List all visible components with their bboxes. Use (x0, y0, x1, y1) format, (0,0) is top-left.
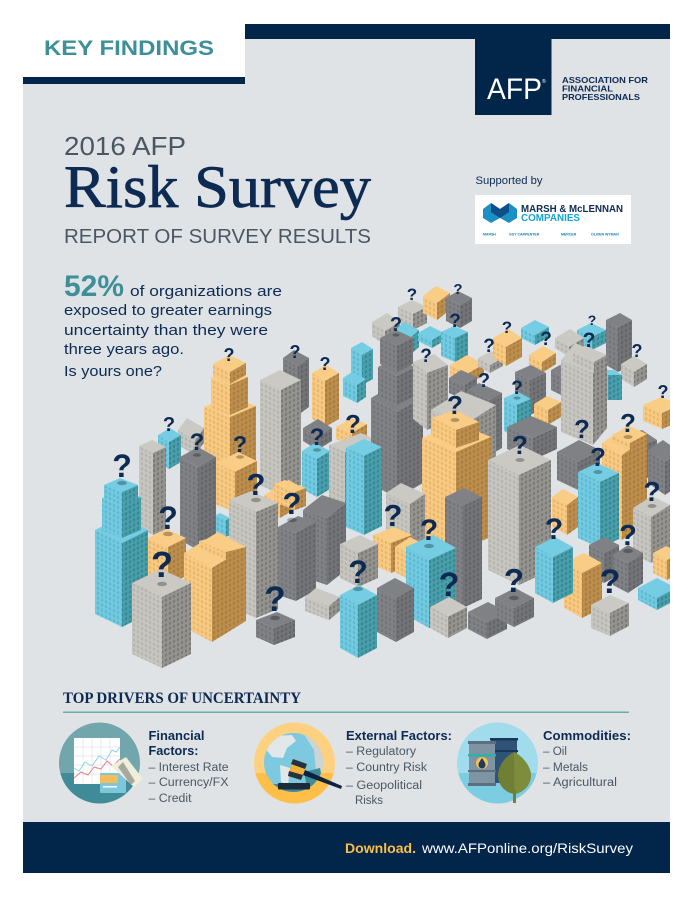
icon: globe and gavel (254, 722, 342, 804)
question marks over buildings: ? (158, 500, 178, 536)
question marks over buildings: ? (453, 281, 463, 298)
question marks over buildings: ? (112, 448, 132, 484)
question marks over buildings: ? (583, 329, 595, 352)
icon: oil barrels and leaf (457, 722, 538, 804)
question marks over buildings: ? (151, 544, 173, 585)
footer bar (23, 822, 670, 873)
text: financial factors: Financial (148, 729, 204, 743)
lead statistic text: of organizations are (130, 283, 282, 300)
question marks over buildings: ? (620, 408, 636, 438)
sponsor logo: Marsh & McLennan Companies: MARSH & McLENNAN (521, 204, 623, 215)
question marks over buildings: ? (511, 378, 523, 399)
text: external factors: – Regulatory (346, 746, 416, 758)
question marks over buildings: ? (420, 514, 438, 547)
AFP logo: ® (542, 78, 546, 85)
question marks over buildings: ? (600, 563, 620, 601)
question marks over buildings: ? (320, 354, 330, 374)
question marks over buildings: ? (439, 566, 459, 604)
top navy bar (245, 24, 670, 39)
question marks over buildings: ? (447, 390, 463, 420)
text: external factors (346, 729, 452, 807)
text: financial factors (148, 729, 229, 805)
question marks over buildings: ? (658, 382, 668, 402)
question marks over buildings (112, 281, 668, 619)
text: commodities: – Metals (543, 762, 588, 774)
centre front buildings (132, 483, 534, 668)
question marks over buildings: ? (632, 341, 642, 361)
question marks over buildings: ? (588, 312, 596, 328)
sponsor logo: Marsh & McLennan Companies: COMPANIES (521, 213, 580, 224)
question marks over buildings: ? (590, 442, 606, 472)
subtitle: REPORT OF SURVEY RESULTS (64, 225, 371, 248)
text: financial factors: Factors: (148, 744, 198, 758)
question marks over buildings: ? (420, 346, 432, 367)
text: external factors: – Geopolitical (346, 780, 422, 792)
question marks over buildings: ? (643, 476, 661, 507)
icon: financial chart and credit card (59, 722, 143, 804)
title: Risk Survey: Risk Survey (64, 154, 371, 220)
footer download link (345, 840, 633, 856)
question marks over buildings: ? (283, 486, 301, 521)
AFP logo: AFP (487, 73, 542, 106)
large blue tower, centre (346, 439, 382, 535)
question marks over buildings: ? (512, 430, 528, 460)
question marks over buildings: ? (502, 318, 512, 337)
question marks over buildings: ? (478, 370, 490, 392)
rooftop vents under question marks (117, 333, 656, 620)
question marks over buildings: ? (384, 498, 402, 533)
sponsor logo: Marsh & McLennan Companies: GUY CARPENTER (509, 232, 540, 236)
association name: FINANCIAL (562, 84, 613, 94)
isometric city illustration (95, 281, 680, 668)
question marks over buildings: ? (233, 431, 247, 457)
back row buildings (372, 286, 647, 387)
text: commodities: – Oil (543, 746, 567, 758)
lead statistic text: uncertainty than they were (64, 322, 268, 339)
supported by label: Supported by (476, 175, 543, 187)
question marks over buildings: ? (390, 314, 402, 336)
AFP logo (475, 39, 552, 115)
text: commodities: – Agricultural (543, 777, 617, 789)
lead statistic text: 52% (64, 270, 124, 303)
text: commodities: Commodities: (543, 729, 631, 743)
lead statistic text: exposed to greater earnings (64, 302, 272, 319)
question marks over buildings: ? (348, 554, 368, 590)
question marks over buildings: ? (190, 429, 204, 456)
big striped tower, centre right (488, 445, 551, 585)
question marks over buildings: ? (290, 342, 300, 362)
right front buildings (535, 463, 680, 636)
question marks over buildings: ? (540, 329, 552, 350)
lead statistic text: Is yours one? (64, 363, 162, 380)
sponsor logo: Marsh & McLennan Companies (475, 195, 631, 244)
question marks over buildings: ? (264, 580, 286, 619)
text: financial factors: – Interest Rate (148, 762, 228, 774)
section rule (63, 712, 629, 713)
big orange tower, centre (422, 410, 491, 552)
lead statistic text: three years ago. (64, 341, 184, 358)
question marks over buildings: ? (483, 336, 495, 357)
middle row buildings (413, 329, 680, 495)
text: external factors: – Country Risk (346, 762, 427, 774)
key findings tab: KEY FINDINGS (44, 37, 214, 60)
central dark tower (371, 330, 423, 498)
sponsor logo: Marsh & McLennan Companies: MERCER (561, 232, 577, 236)
question marks over buildings: ? (163, 414, 175, 436)
question marks over buildings: ? (545, 513, 563, 546)
question marks over buildings: ? (449, 311, 461, 332)
question marks over buildings: ? (407, 285, 417, 304)
lead statistic text (64, 270, 282, 380)
footer download link: www.AFPonline.org/RiskSurvey (421, 840, 633, 856)
left back buildings (139, 342, 377, 550)
question marks over buildings: ? (345, 409, 361, 439)
sponsor logo: Marsh & McLennan Companies: MARSH (483, 232, 496, 236)
sponsor logo: Marsh & McLennan Companies: OLIVER WYMAN (591, 232, 619, 236)
section heading: top drivers: TOP DRIVERS OF UNCERTAINTY (63, 690, 301, 707)
question marks over buildings: ? (247, 467, 265, 502)
question marks over buildings: ? (224, 345, 234, 365)
association name: PROFESSIONALS (562, 92, 640, 102)
text: external factors: External Factors: (346, 729, 452, 743)
text: external factors: Risks (355, 795, 383, 807)
tall orange tower, right (602, 426, 647, 540)
key findings tab (23, 24, 245, 84)
text: commodities (543, 729, 631, 789)
text: financial factors: – Credit (148, 793, 192, 805)
title: 2016 AFP: 2016 AFP (64, 131, 186, 161)
footer download link: Download. (345, 840, 416, 856)
question marks over buildings: ? (504, 562, 524, 599)
association name: ASSOCIATION FOR (562, 75, 648, 85)
left middle buildings (148, 452, 346, 618)
question marks over buildings: ? (619, 520, 637, 552)
blue stepped tower, left (95, 478, 148, 627)
question marks over buildings: ? (310, 424, 324, 451)
association name (562, 75, 648, 102)
text: financial factors: – Currency/FX (148, 777, 229, 789)
orange stepped block (184, 532, 246, 642)
question marks over buildings: ? (574, 414, 590, 444)
